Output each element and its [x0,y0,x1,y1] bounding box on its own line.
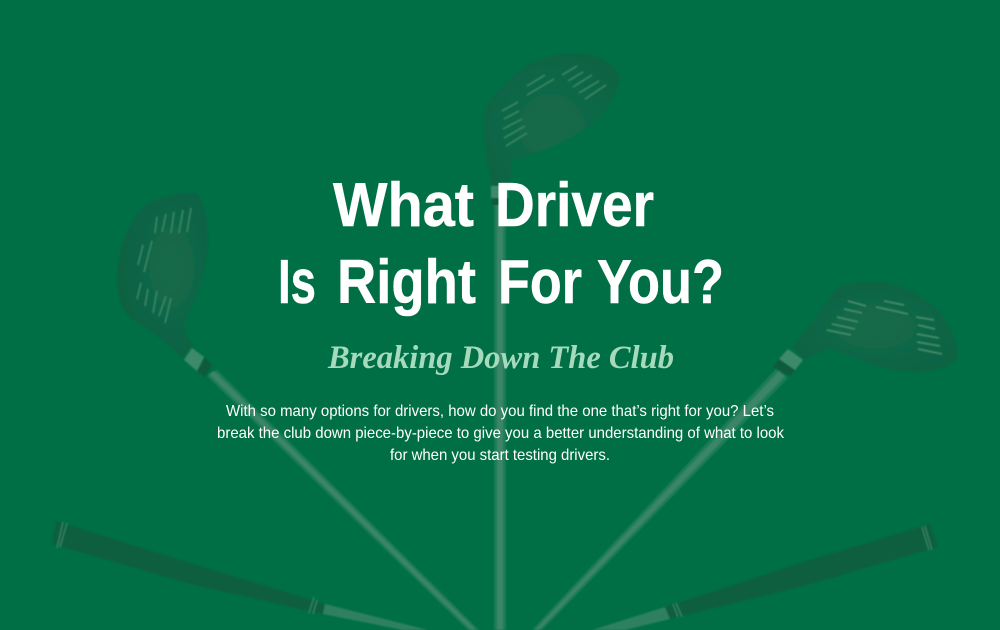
intro paragraph: break the club down piece-by-piece to give you a better understanding of what to look [217,425,784,442]
club: right driver [532,282,958,630]
club: center driver [483,53,620,630]
title: Right [337,248,476,317]
title: Is [278,248,316,317]
intro paragraph [217,403,784,464]
club: lower left grip [52,521,428,630]
title [278,171,724,317]
club: lower right grip [592,524,938,630]
intro paragraph: for when you start testing drivers. [390,447,610,464]
intro paragraph: With so many options for drivers, how do you find the one that’s right for you? Let’s [226,403,774,420]
subtitle: Breaking Down The Club [327,340,674,376]
club: left driver [117,193,479,630]
title: You? [597,248,724,317]
title: What [333,171,474,240]
title: For [498,248,582,317]
title: Driver [495,171,654,240]
